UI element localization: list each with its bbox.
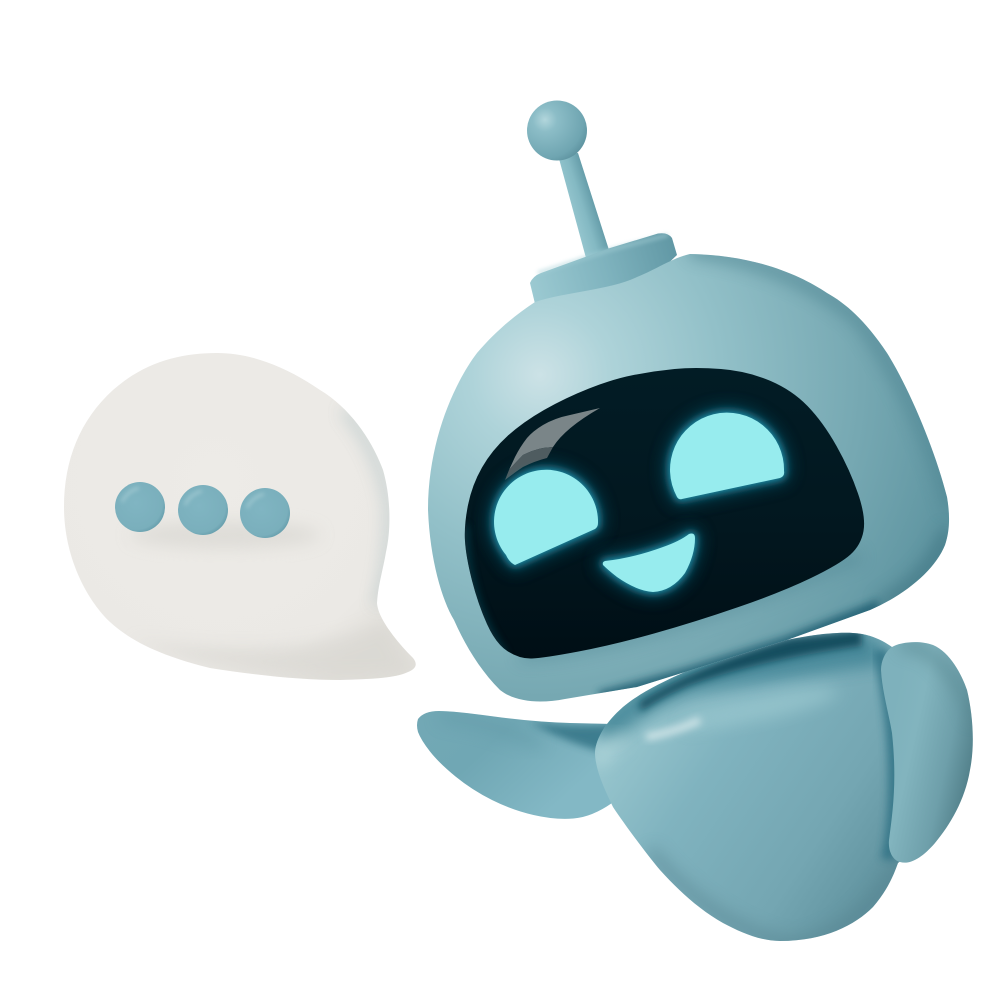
right eye (670, 413, 784, 499)
robot left arm (417, 711, 615, 819)
screen reflection (505, 408, 600, 480)
antenna stem (558, 153, 609, 258)
illustration: robot with speech bubble (64, 100, 973, 941)
bubble dots (115, 482, 290, 538)
antenna ball (527, 100, 587, 160)
robot body (595, 630, 915, 945)
robot right arm (881, 642, 975, 863)
left eye (494, 470, 598, 565)
smile (603, 534, 695, 592)
antenna base (530, 233, 677, 312)
speech bubble (64, 353, 416, 680)
robot head (428, 250, 952, 702)
face screen (465, 368, 864, 659)
